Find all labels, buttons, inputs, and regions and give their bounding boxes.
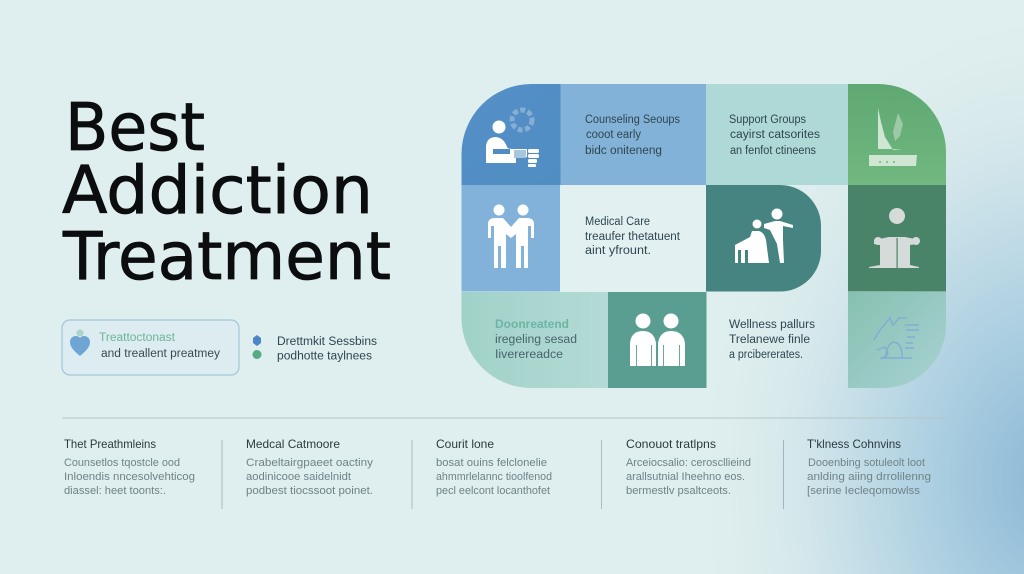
column 5: T'klness Cohnvins: [807, 437, 901, 451]
legend label: [99, 332, 220, 360]
cell: prevention text: iregeling sesad: [495, 334, 577, 346]
column 1: Thet Preathmleins: [64, 437, 156, 451]
legend label: and treallent preatmey: [101, 348, 220, 360]
cell: support text: Support Groups: [729, 114, 806, 126]
cell: prevention text: [462, 292, 608, 388]
title: Treatment: [62, 218, 391, 295]
legend key: podhotte taylnees: [277, 350, 372, 362]
column 5: [807, 437, 931, 497]
column 4: arallsutnial Iheehno eos.: [626, 471, 745, 483]
column 3: ahmmrlelannc tioolfenod: [436, 471, 552, 483]
cell: counseling text: [560, 84, 706, 185]
cell: support text: [706, 84, 848, 185]
column 3: pecl eelcont locanthofet: [436, 485, 550, 497]
cell: support text: an fenfot ctineens: [730, 145, 816, 157]
column 1: diassel: heet toonts:.: [64, 485, 166, 497]
icon: two people: [488, 204, 534, 268]
column 3: [436, 437, 552, 497]
cell: counseling text: bidc oniteneng: [585, 145, 662, 157]
column 2: aodinicooe saidelnidt: [246, 471, 351, 483]
icon: pair of people: [630, 314, 685, 366]
cell: support text: cayirst catsorites: [730, 129, 820, 141]
divider line: [62, 418, 946, 419]
cell: counseling text: cooot early: [586, 129, 641, 141]
cell: prevention text: Doonreatend: [495, 319, 569, 331]
icon: person with puzzle: [486, 110, 539, 167]
column 1: Inloendis nncesolvehticog: [64, 471, 195, 483]
icon: figure at podium: [869, 208, 920, 268]
cell: prevention text: Iiverereadce: [495, 349, 563, 361]
legend box: [62, 320, 239, 375]
icon: heart: [70, 330, 90, 356]
legend key: Drettmkit Sessbins: [277, 336, 377, 348]
cell: medical icon: [462, 185, 560, 292]
cell: medical text: [560, 185, 706, 292]
cell: wellness text: [729, 319, 815, 361]
icon: monument: [869, 108, 917, 166]
column 5: [serine Iecleqomowlss: [807, 485, 921, 497]
legend key: [252, 335, 377, 362]
cell: wellness text: a prcibererates.: [729, 349, 803, 361]
column 2: Medcal Catmoore: [246, 437, 340, 451]
cell: medical text: aint yfrount.: [585, 245, 651, 257]
column 2: [246, 437, 374, 497]
column 5: anlding aiing drrolilenng: [807, 471, 931, 483]
title: Best: [65, 89, 205, 166]
column 1: [64, 437, 195, 497]
column 3: bosat ouins felclonelie: [436, 457, 547, 469]
cell: pair icon: [608, 292, 706, 388]
cell: wellness text: Wellness pallurs: [729, 319, 815, 331]
icon: adult and child: [735, 208, 793, 263]
column 3: Courit lone: [436, 437, 494, 451]
cell: counseling icon: [462, 84, 560, 185]
icon: line drawing: [874, 318, 919, 358]
panel: treatment grid: [462, 84, 946, 388]
cell: outline icon: [848, 292, 946, 388]
column 4: bermestlv psaltceots.: [626, 485, 731, 497]
title: Addiction: [62, 152, 373, 229]
cell: green icon: [848, 84, 946, 185]
column 4: [626, 437, 751, 497]
cell: teal icon: [706, 185, 821, 292]
column 2: Crabeltairgpaeet oactiny: [246, 457, 374, 469]
column 2: podbest tiocssoot poinet.: [246, 485, 373, 497]
column 5: Dooenbing sotuleolt loot: [808, 457, 925, 469]
legend label: Treattoctonast: [99, 332, 176, 344]
cell: medical text: Medical Care: [585, 216, 650, 228]
cell: wellness text: Trelanewe finle: [729, 334, 810, 346]
title: [62, 89, 391, 295]
cell: dark green icon: [848, 185, 946, 292]
cell: counseling text: Counseling Seoups: [585, 114, 680, 126]
cell: medical text: treaufer thetatuent: [585, 231, 681, 243]
column 4: Conouot tratlpns: [626, 437, 716, 451]
column 1: Counsetlos tqostcle ood: [64, 457, 180, 469]
column 4: Arceiocsalio: ceroscllieind: [626, 457, 751, 469]
